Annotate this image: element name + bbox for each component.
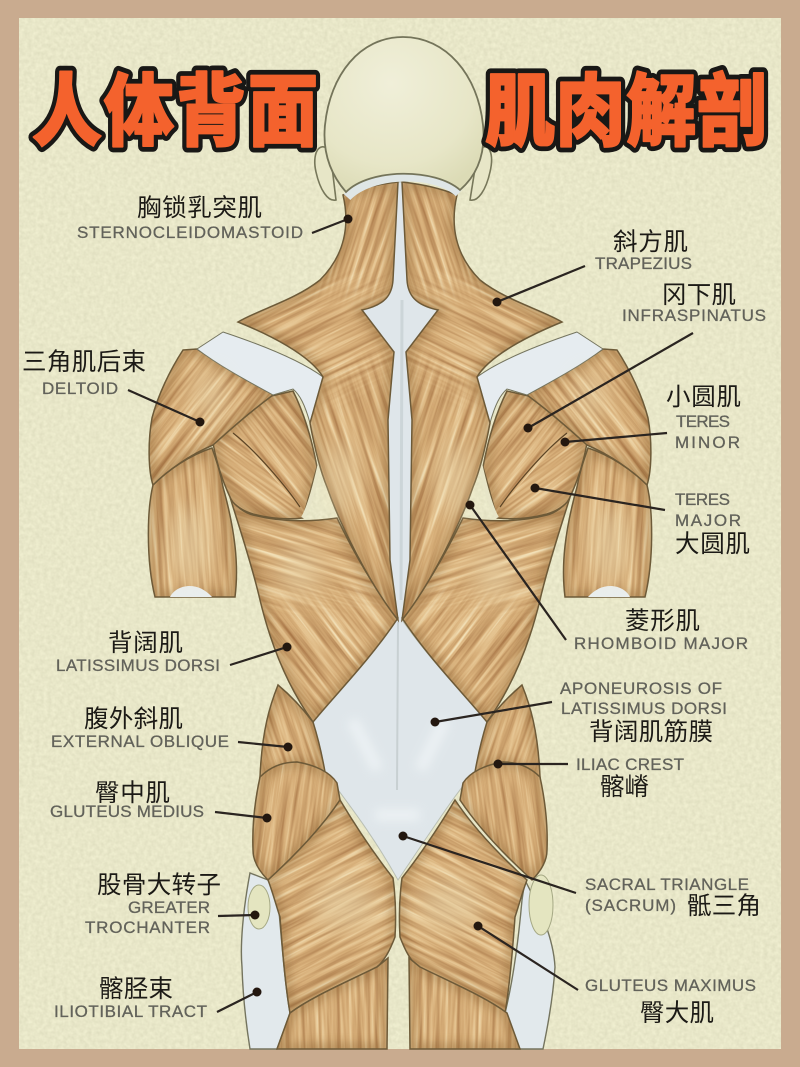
panel: right trunk muscles [400, 182, 652, 881]
callout: gluteus maximus [474, 922, 756, 1027]
panel: right IT band [505, 880, 555, 1049]
callout: teres major: MAJOR [675, 511, 741, 530]
callout: rhomboid major [466, 500, 748, 653]
callout: greater trochanter: 股骨大转子 [97, 871, 221, 899]
muscle: left teres and infraspinatus [212, 390, 318, 520]
callout: sacral triangle: (SACRUM) [585, 896, 676, 915]
panel: left shoulder white tendon [197, 332, 323, 423]
callout: infraspinatus [524, 282, 766, 432]
callout: latissimus dorsi: LATISSIMUS DORSI [56, 656, 220, 675]
title: right part: 肌肉解剖 [485, 67, 767, 156]
callout: teres minor: TERES [676, 412, 730, 431]
callout: iliac crest [494, 755, 684, 801]
callout: iliac crest: ILIAC CREST [576, 755, 684, 774]
callout: sacral triangle: 骶三角 [687, 892, 761, 920]
muscle: left latissimus dorsi [229, 497, 399, 722]
title: left part: 人体背面 [32, 67, 318, 156]
callout: gluteus maximus: 臀大肌 [640, 999, 714, 1027]
icon: head and ears [315, 37, 492, 200]
callout: teres major [530, 484, 750, 558]
panel: left IT band [241, 873, 290, 1049]
muscle: left upper arm [148, 447, 238, 598]
muscle: left external oblique [259, 684, 326, 778]
callout: sacral triangle [398, 832, 761, 920]
callout: external oblique [51, 705, 292, 752]
title: left part: 人体背面 [32, 67, 318, 156]
title: right part: 肌肉解剖 [485, 67, 767, 156]
callout: trapezius: 斜方肌 [613, 228, 688, 256]
callout: gluteus maximus: GLUTEUS MAXIMUS [585, 976, 756, 995]
callout: iliotibial tract: ILIOTIBIAL TRACT [54, 1002, 207, 1021]
callout: iliac crest: 髂嵴 [600, 773, 649, 801]
callout: teres major: TERES [675, 490, 730, 509]
callout: teres minor: MINOR [675, 433, 740, 452]
muscle: right external oblique [474, 684, 541, 778]
muscle: left gluteus medius [252, 761, 341, 880]
callout: greater trochanter [85, 871, 260, 937]
callout: iliotibial tract: 髂胫束 [99, 975, 173, 1003]
muscle: right trapezius [400, 182, 564, 622]
callout: greater trochanter: GREATER [128, 898, 210, 917]
callout: sternocleidomastoid: 胸锁乳突肌 [137, 194, 262, 222]
callout: rhomboid major: 菱形肌 [625, 607, 700, 635]
callout: trapezius [492, 228, 692, 306]
callout: trapezius: TRAPEZIUS [595, 254, 692, 273]
panel: left body muscles [148, 182, 400, 1050]
callout: gluteus medius: 臀中肌 [95, 779, 170, 807]
callout: aponeurosis of latissimus dorsi: APONEUROSIS OF [560, 679, 722, 698]
callout: deltoid: DELTOID [42, 379, 118, 398]
callout: teres major: 大圆肌 [675, 530, 750, 558]
callout: deltoid: 三角肌后束 [22, 348, 146, 376]
callout: sacral triangle: SACRAL TRIANGLE [585, 875, 749, 894]
callout: sternocleidomastoid [77, 194, 352, 242]
muscle: right upper arm [562, 447, 652, 598]
panel: right lower body muscles [398, 798, 528, 1050]
panel: right shoulder white tendon [477, 332, 603, 423]
callout: gluteus medius [50, 779, 272, 822]
callout: deltoid [22, 348, 204, 426]
callout: infraspinatus: 冈下肌 [662, 282, 736, 309]
callout: iliotibial tract [54, 975, 262, 1021]
icon: left greater trochanter [248, 885, 270, 929]
muscle: left gluteus maximus [267, 800, 396, 1013]
callout: greater trochanter: TROCHANTER [85, 918, 210, 937]
callout: infraspinatus: INFRASPINATUS [622, 306, 766, 325]
callout: sternocleidomastoid: STERNOCLEIDOMASTOID [77, 223, 303, 242]
muscle: right deltoid [528, 348, 652, 486]
muscle: right teres and infraspinatus [482, 390, 588, 520]
panel: central white fascia [313, 182, 487, 880]
icon: right greater trochanter [529, 875, 553, 935]
muscle: right hamstrings [408, 956, 521, 1050]
callout: external oblique: EXTERNAL OBLIQUE [51, 732, 229, 751]
muscle: right gluteus medius [459, 761, 548, 881]
callout: external oblique: 腹外斜肌 [84, 705, 183, 733]
callout: aponeurosis of latissimus dorsi [430, 679, 727, 746]
muscle: left deltoid [148, 348, 272, 486]
highlights: pale sheen on muscles [170, 371, 630, 929]
callout: teres minor: 小圆肌 [666, 383, 741, 411]
callout: aponeurosis of latissimus dorsi: LATISSIMUS DORSI [561, 699, 727, 718]
callout: rhomboid major: RHOMBOID MAJOR [574, 634, 748, 653]
callout: gluteus medius: GLUTEUS MEDIUS [50, 802, 204, 821]
muscle: right latissimus dorsi [401, 497, 571, 722]
callout: latissimus dorsi: 背阔肌 [108, 629, 183, 657]
muscle: left trapezius [236, 182, 400, 622]
muscle: left hamstrings [276, 956, 389, 1050]
callout: teres minor [560, 383, 741, 452]
muscle: right gluteus maximus [398, 798, 528, 1012]
callout: aponeurosis of latissimus dorsi: 背阔肌筋膜 [589, 718, 713, 746]
callout: latissimus dorsi [56, 629, 292, 675]
